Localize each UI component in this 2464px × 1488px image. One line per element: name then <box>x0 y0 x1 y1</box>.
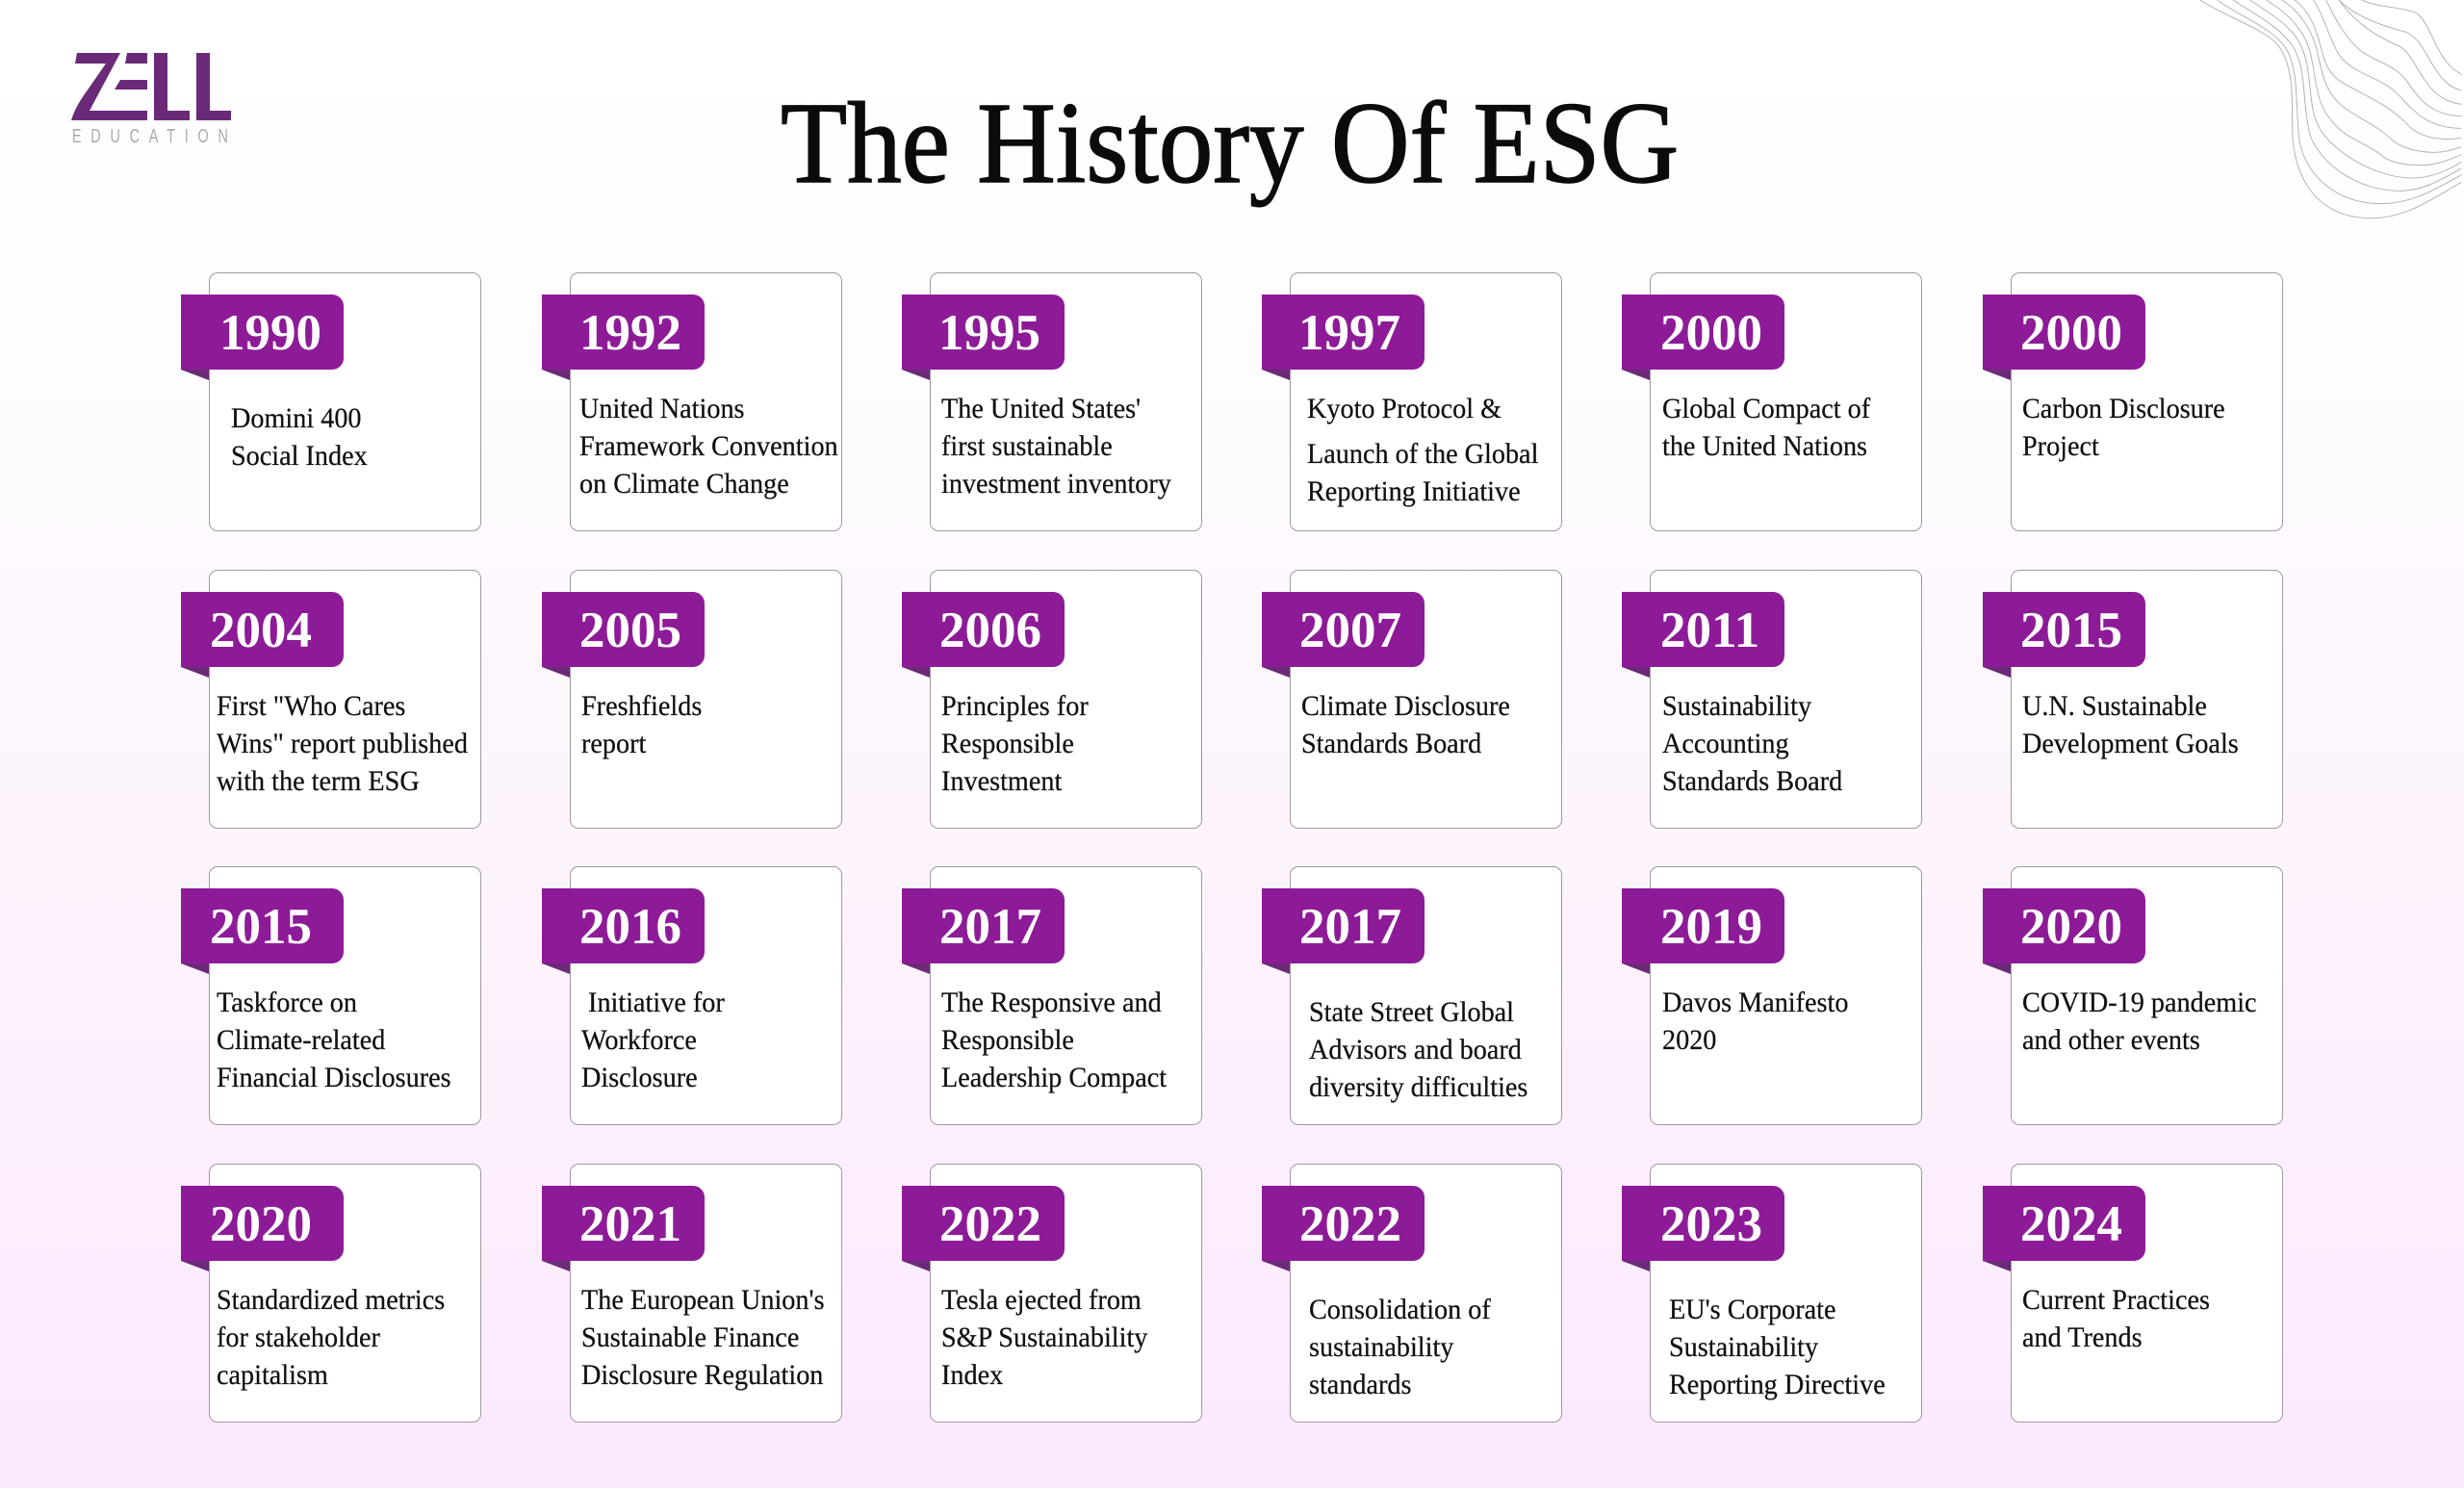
card: 1992 <box>542 272 842 531</box>
card: 2022 Consolidation <box>1262 1164 1562 1423</box>
card: 2004: First "Who Cares Wins" report published with the term ESG <box>217 689 468 797</box>
card: 2000 Carbon Disclosure <box>1983 272 2283 531</box>
card: 1992: 1992 <box>579 305 681 361</box>
card: 1997: 1997 <box>1298 305 1400 361</box>
logo: Zell Education <box>71 53 231 147</box>
card: 2020 COVID <box>1983 866 2283 1125</box>
card: 2006: 2006 <box>939 603 1041 658</box>
card: 1990 <box>181 272 481 531</box>
card: 2019 <box>1622 866 1922 1125</box>
card: 2017 Compact <box>902 866 1202 1125</box>
card: 2011 <box>1622 570 1922 829</box>
card: 2023: 2023 <box>1660 1196 1762 1252</box>
card: 2007 <box>1262 570 1562 829</box>
card: 2000 Carbon Disclosure: Carbon Disclosure Project <box>2022 393 2225 462</box>
card: 2015 TCFD: 2015 <box>210 899 312 955</box>
card: 2000 Carbon Disclosure: 2000 <box>2020 305 2122 361</box>
card: 2015 TCFD: Taskforce on Climate-related Financial Disclosures <box>217 986 451 1093</box>
logo: Zell Education: EDUCATION <box>72 125 228 147</box>
card: 2000 Global Compact <box>1622 272 1922 531</box>
card: 2023: EU's Corporate Sustainability Reporting Directive <box>1669 1294 1886 1399</box>
decorative wave lines <box>2200 0 2462 219</box>
card: 1997 <box>1262 272 1562 531</box>
card: 2016: 2016 <box>579 899 681 955</box>
card: 2000 Global Compact: Global Compact of the United Nations <box>1662 393 1870 462</box>
card: 2022 Tesla: 2022 <box>939 1196 1041 1252</box>
card: 2024: Current Practices and Trends <box>2022 1284 2210 1353</box>
card: 2007: Climate Disclosure Standards Board <box>1301 689 1510 758</box>
card: 1995 <box>902 272 1202 531</box>
card: 2021: The European Union's Sustainable Finance Disclosure Regulation <box>581 1284 825 1390</box>
card: 2022 Tesla <box>902 1164 1202 1423</box>
card: 2005: Freshfields report <box>581 689 702 758</box>
card: 2017 Compact: The Responsive and Responsible Leadership Compact <box>941 986 1167 1093</box>
card: 2011: Sustainability Accounting Standards Board <box>1662 689 1842 797</box>
card: 1995: The United States' first sustainable investment inventory <box>941 393 1171 499</box>
card: 2005 <box>542 570 842 829</box>
card: 2020 COVID: COVID-19 pandemic and other events <box>2022 986 2257 1055</box>
card: 2016 <box>542 866 842 1125</box>
card: 2021 <box>542 1164 842 1423</box>
card: 2006: Principles for Responsible Investment <box>941 689 1089 797</box>
card: 2017 State Street: 2017 <box>1299 899 1401 955</box>
card: 1995: 1995 <box>938 305 1040 361</box>
card: 2017 State Street <box>1262 866 1562 1125</box>
card: 2005: 2005 <box>579 603 681 658</box>
card: 1997: Kyoto Protocol & <box>1307 393 1502 423</box>
card: 2016: Initiative for Workforce Disclosure <box>581 986 725 1093</box>
card: 2021: 2021 <box>579 1196 681 1252</box>
card: 2020 metrics: Standardized metrics for stakeholder capitalism <box>217 1284 445 1390</box>
card: 1997: Launch of the Global Reporting Initiative <box>1307 437 1538 506</box>
card: 2020 metrics: 2020 <box>210 1196 312 1252</box>
card: 2022 Tesla: Tesla ejected from S&P Sustainability Index <box>941 1284 1147 1390</box>
card: 2004 <box>181 570 481 829</box>
card: 2007: 2007 <box>1299 603 1401 658</box>
card: 2017 Compact: 2017 <box>939 899 1041 955</box>
card: 2015 TCFD <box>181 866 481 1125</box>
card: 2020 COVID: 2020 <box>2020 899 2122 955</box>
card: 2023 <box>1622 1164 1922 1423</box>
card: 2015 SDGs: 2015 <box>2020 603 2122 658</box>
card: 2004: 2004 <box>210 603 312 658</box>
card: 2017 State Street: State Street Global Advisors and board diversity difficulties <box>1309 995 1527 1103</box>
card: 1992: United Nations Framework Convention on Climate Change <box>579 393 838 499</box>
card: 2022 Consolidation: Consolidation of sustainability standards <box>1309 1294 1491 1399</box>
card: 2015 SDGs <box>1983 570 2283 829</box>
title: The History Of ESG <box>781 79 1679 208</box>
card: 2006 <box>902 570 1202 829</box>
card: 2011: 2011 <box>1660 603 1759 658</box>
card: 2022 Consolidation: 2022 <box>1299 1196 1401 1252</box>
card: 2024: 2024 <box>2020 1196 2122 1252</box>
card: 2015 SDGs: U.N. Sustainable Development Goals <box>2022 689 2239 758</box>
card: 2024 <box>1983 1164 2283 1423</box>
card: 1990: Domini 400 Social Index <box>231 402 368 472</box>
card: 2019: Davos Manifesto 2020 <box>1662 986 1848 1055</box>
card: 2000 Global Compact: 2000 <box>1660 305 1762 361</box>
card: 2019: 2019 <box>1660 899 1762 955</box>
card: 2020 metrics <box>181 1164 481 1423</box>
card: 1990: 1990 <box>219 305 321 361</box>
